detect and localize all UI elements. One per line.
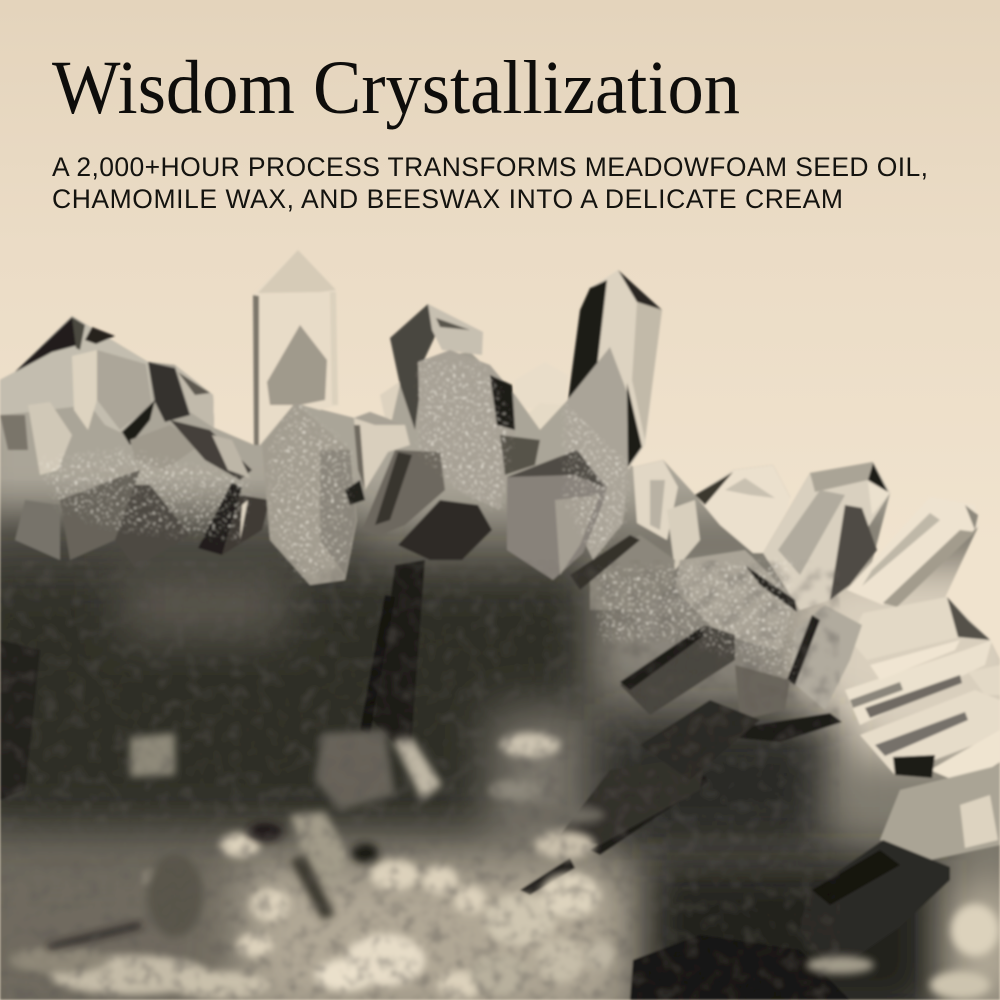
crystal: pale far-right point <box>847 497 990 660</box>
crystal: dark frame facets centre <box>345 450 492 560</box>
crystal: ghost crystals behind the cluster <box>380 362 568 460</box>
crystal: centre dark point <box>390 304 540 510</box>
title: Wisdom Crystallization <box>52 46 740 130</box>
crystal: left cap <box>0 316 214 475</box>
crystal: right tall point <box>565 270 662 560</box>
crystal: dark slab centre right <box>507 450 607 580</box>
crystal: mid right mass facets <box>570 535 862 720</box>
subtitle: A 2,000+HOUR PROCESS TRANSFORMS MEADOWFOAM SEED OIL, <box>52 152 928 182</box>
dark spars and shadows <box>0 560 950 1000</box>
crystal: sparkling facet below tall point <box>262 403 357 585</box>
photo: crystal cluster <box>0 240 1000 1000</box>
subtitle: CHAMOMILE WAX, AND BEESWAX INTO A DELICATE CREAM <box>52 184 843 214</box>
pale slabs in the shadowed middle <box>130 730 874 974</box>
crystal: right cluster clear points <box>633 460 890 610</box>
crystal: right-side pale shards <box>845 640 1000 860</box>
subtitle <box>52 152 928 214</box>
crystal mass tonal base <box>0 352 1000 1000</box>
crystal: tall clear point <box>253 250 338 445</box>
crystal texture: dark flecks and sparkle <box>0 360 840 1000</box>
dark blotches among rubble <box>45 823 379 950</box>
crystal: small clear block <box>354 412 410 490</box>
crystal: small dark spars left of tall point <box>15 420 270 568</box>
mottled pale rubble at bottom <box>10 812 999 999</box>
